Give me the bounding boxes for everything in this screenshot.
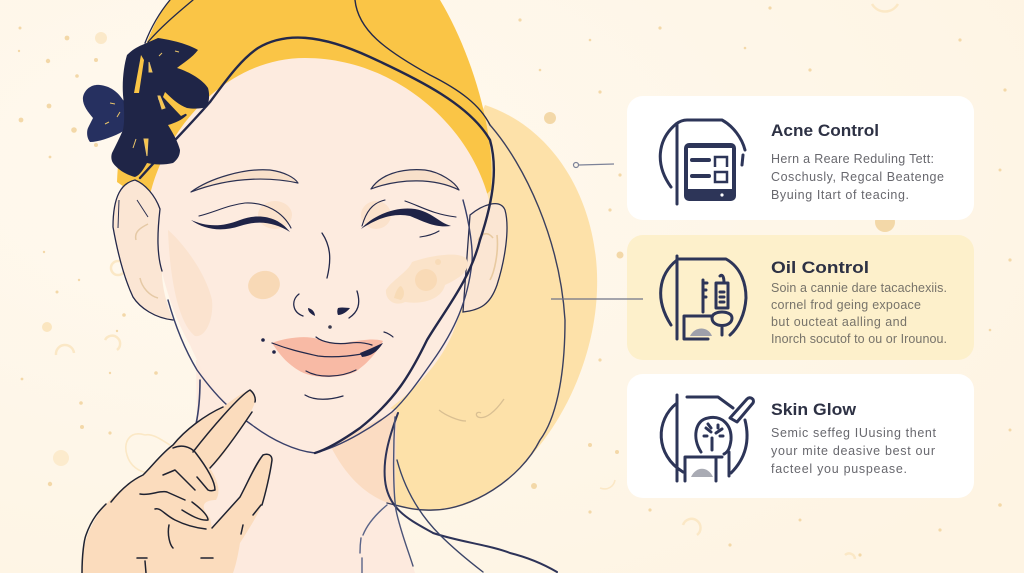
face: [150, 58, 489, 453]
text: skin glow: facteel you puspease.: [771, 462, 907, 476]
heading: skin glow: Skin Glow: [771, 400, 857, 419]
panel: oil control: [627, 235, 974, 360]
left eyebrow: [191, 170, 298, 192]
text: acne control: [771, 152, 944, 202]
hand: [82, 390, 272, 573]
neck shadow: [330, 410, 397, 505]
text: oil control: cornel frod geing expoace: [771, 298, 921, 312]
flowing hair loop: [387, 125, 565, 510]
lips: [261, 332, 393, 399]
heading: oil control: Oil Control: [771, 258, 869, 277]
left eye shadows: [258, 201, 292, 229]
leader line: acne control: [574, 162, 614, 168]
ear left: [113, 180, 173, 320]
leader line: oil control: [551, 298, 643, 300]
cheek spot left: [245, 267, 283, 303]
text: skin glow: Semic seffeg IUusing thent: [771, 426, 937, 440]
heading: acne control: Acne Control: [771, 121, 879, 140]
cheek blush left: [168, 230, 212, 336]
text: oil control: Inorch socutof to ou or Irounou.: [771, 332, 947, 346]
text: acne control: Byuing Itart of teacing.: [771, 188, 909, 202]
text: oil control: but oucteat aalling and: [771, 315, 907, 329]
long thick hair strand: [140, 38, 494, 453]
thin hair line top: [355, 0, 490, 125]
icon: oil bottle: [661, 256, 746, 339]
right eyebrow: [371, 170, 459, 190]
cheek patches right: [386, 255, 468, 304]
nose: [294, 233, 359, 329]
neck and body: [160, 360, 415, 573]
icon: skin device: [661, 395, 753, 481]
hair: [117, 0, 492, 210]
large yellow circle behind head: [330, 105, 597, 511]
icon: tablet: [660, 120, 745, 204]
text: acne control: Hern a Reare Reduling Tett:: [771, 152, 934, 166]
yellow blob contour marks: [439, 399, 504, 421]
text: acne control: Coschusly, Regcal Beatenge: [771, 170, 944, 184]
panel: acne control: [627, 96, 974, 220]
right eye shadows: [361, 201, 391, 229]
text: oil control: [771, 281, 947, 346]
ear right: [463, 204, 507, 312]
hair strands lower: [360, 413, 557, 573]
hair outer contour: [145, 0, 193, 43]
flower hair ornament: [83, 38, 209, 177]
text: oil control: Soin a cannie dare tacachexiis.: [771, 281, 947, 295]
left eye: [191, 203, 291, 232]
text: skin glow: [771, 426, 937, 476]
right eye: [361, 200, 456, 237]
panel: skin glow: [627, 374, 974, 498]
face outline right side and jaw: [168, 200, 472, 453]
text: skin glow: your mite deasive best our: [771, 444, 935, 458]
left neck line: [196, 380, 200, 424]
